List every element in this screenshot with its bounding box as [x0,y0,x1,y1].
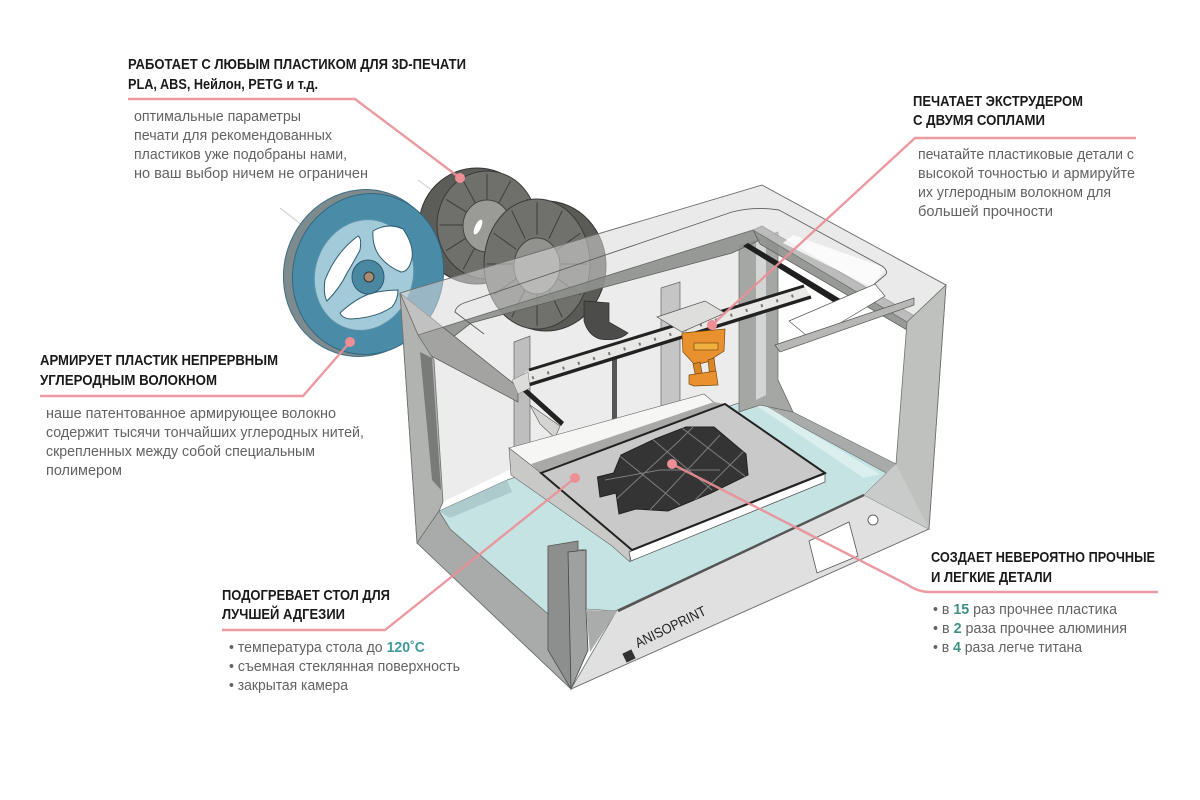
glass lid [400,185,946,335]
heading: plastics: PLA, ABS, Нейлон, PETG и т.д. [128,76,318,93]
light floor stripe [748,400,880,478]
front corner post [548,541,588,689]
callout lines [40,99,1158,630]
right top handle and door edge [775,284,914,352]
top frame beam, back-right [753,226,918,330]
body: extruder: печатайте пластиковые детали с [918,147,1134,163]
orange extruder [682,329,725,386]
list: strong parts: • в 15 раз прочнее пластика [933,602,1118,618]
heading: heated bed: ПОДОГРЕВАЕТ СТОЛ ДЛЯ [222,587,390,604]
list: heated bed: • температура стола до 120˚C [229,640,426,656]
heading: fiber: УГЛЕРОДНЫМ ВОЛОКНОМ [40,372,217,389]
bed white back strip [509,394,723,473]
body: extruder: высокой точностью и армируйте [918,166,1135,182]
heading: fiber [40,352,278,389]
body: fiber: содержит тысячи тончайших углеродных нитей, [46,425,364,441]
left floor stripe [439,480,512,518]
base right corner [864,464,929,529]
list: strong parts: • в 4 раза легче титана [933,640,1083,656]
heading: plastics [128,56,466,93]
text block: extruder [913,93,1135,220]
icon: front spool [484,199,606,331]
top frame beam, front-left [400,293,518,402]
body: plastics [134,109,368,182]
text block: plastics [128,56,466,182]
heading: extruder: С ДВУМЯ СОПЛАМИ [913,112,1045,129]
screen [809,522,858,573]
3D printer [400,185,946,689]
heading: extruder [913,93,1083,129]
body: fiber: полимером [46,463,122,479]
spool hub [352,260,384,294]
heading: plastics: РАБОТАЕТ С ЛЮБЫМ ПЛАСТИКОМ ДЛЯ 3D-ПЕЧАТИ [128,56,466,73]
body: fiber [46,406,364,479]
heading: strong parts: И ЛЕГКИЕ ДЕТАЛИ [931,569,1052,586]
thin bed rod [612,358,617,434]
bottom frame, left [417,511,571,689]
bed left side [509,448,630,562]
top frame beam, back-left [418,230,760,352]
back wall window [418,230,753,502]
leader: parts [672,464,1158,592]
bed back double rail [531,402,725,473]
bed plate [541,404,825,550]
extruder carriage plate [657,301,725,332]
body: fiber: скрепленных между собой специальным [46,444,315,460]
body: plastics: оптимальные параметры [134,109,301,125]
body: plastics: печати для рекомендованных [134,128,333,144]
base right button [868,515,878,525]
print bed [509,394,825,562]
callout dots [345,173,717,483]
icon: dark filament spools [418,168,606,331]
icon: back spool [419,168,537,284]
body: extruder: большей прочности [918,204,1053,220]
dark rear bracket [584,301,628,340]
y rail, back right [743,243,842,305]
lid handle slot [783,235,886,287]
list: heated bed: • съемная стеклянная поверхность [229,659,460,675]
heading: heated bed [222,587,390,623]
x gantry rail [512,285,811,394]
lid cut-out outline [455,208,887,334]
list: strong parts [933,602,1127,656]
list: heated bed: • закрытая камера [229,678,349,694]
front base panel [571,495,929,689]
spool windows [324,226,412,319]
teal floor [439,400,896,614]
list: heated bed [229,640,460,694]
body: extruder: их углеродным волокном для [918,185,1111,201]
heading: extruder: ПЕЧАТАЕТ ЭКСТРУДЕРОМ [913,93,1083,110]
body: plastics: но ваш выбор ничем не ограничен [134,166,368,182]
left back column [514,336,530,456]
text block: strong parts [931,549,1155,656]
leader: extruder [712,138,1136,325]
icon: blue carbon fiber spool [262,169,464,377]
back right floor band [760,380,896,474]
leader: fiber [40,342,350,396]
printed black part [597,426,748,515]
right corner column [896,285,946,529]
bed front rail [629,474,825,561]
list: strong parts: • в 2 раза прочнее алюминия [933,621,1127,637]
leader: plastics [128,99,460,178]
body: extruder [918,147,1135,220]
leader: bed [222,478,575,630]
middle back column [661,282,680,410]
base gray corner band [586,610,617,652]
printer outline [400,185,946,689]
heading: fiber: АРМИРУЕТ ПЛАСТИК НЕПРЕРВНЫМ [40,352,278,369]
right window [778,250,907,464]
text block: heated bed [222,587,460,694]
heading: heated bed: ЛУЧШЕЙ АДГЕЗИИ [222,605,345,623]
heading: strong parts: СОЗДАЕТ НЕВЕРОЯТНО ПРОЧНЫЕ [931,549,1155,566]
inner left column stripe [420,352,441,490]
brand logo text: ANISOPRINT [632,602,709,651]
brand logo text [622,602,709,663]
back corner column [739,232,793,412]
body: fiber: наше патентованное армирующее волокно [46,406,336,422]
base dark lip [618,495,864,611]
y rail, front left [520,386,564,438]
body: plastics: пластиков уже подобраны нами, [134,147,347,163]
heading: strong parts [931,549,1155,586]
left corner column [400,293,443,543]
text block: fiber [40,352,364,479]
